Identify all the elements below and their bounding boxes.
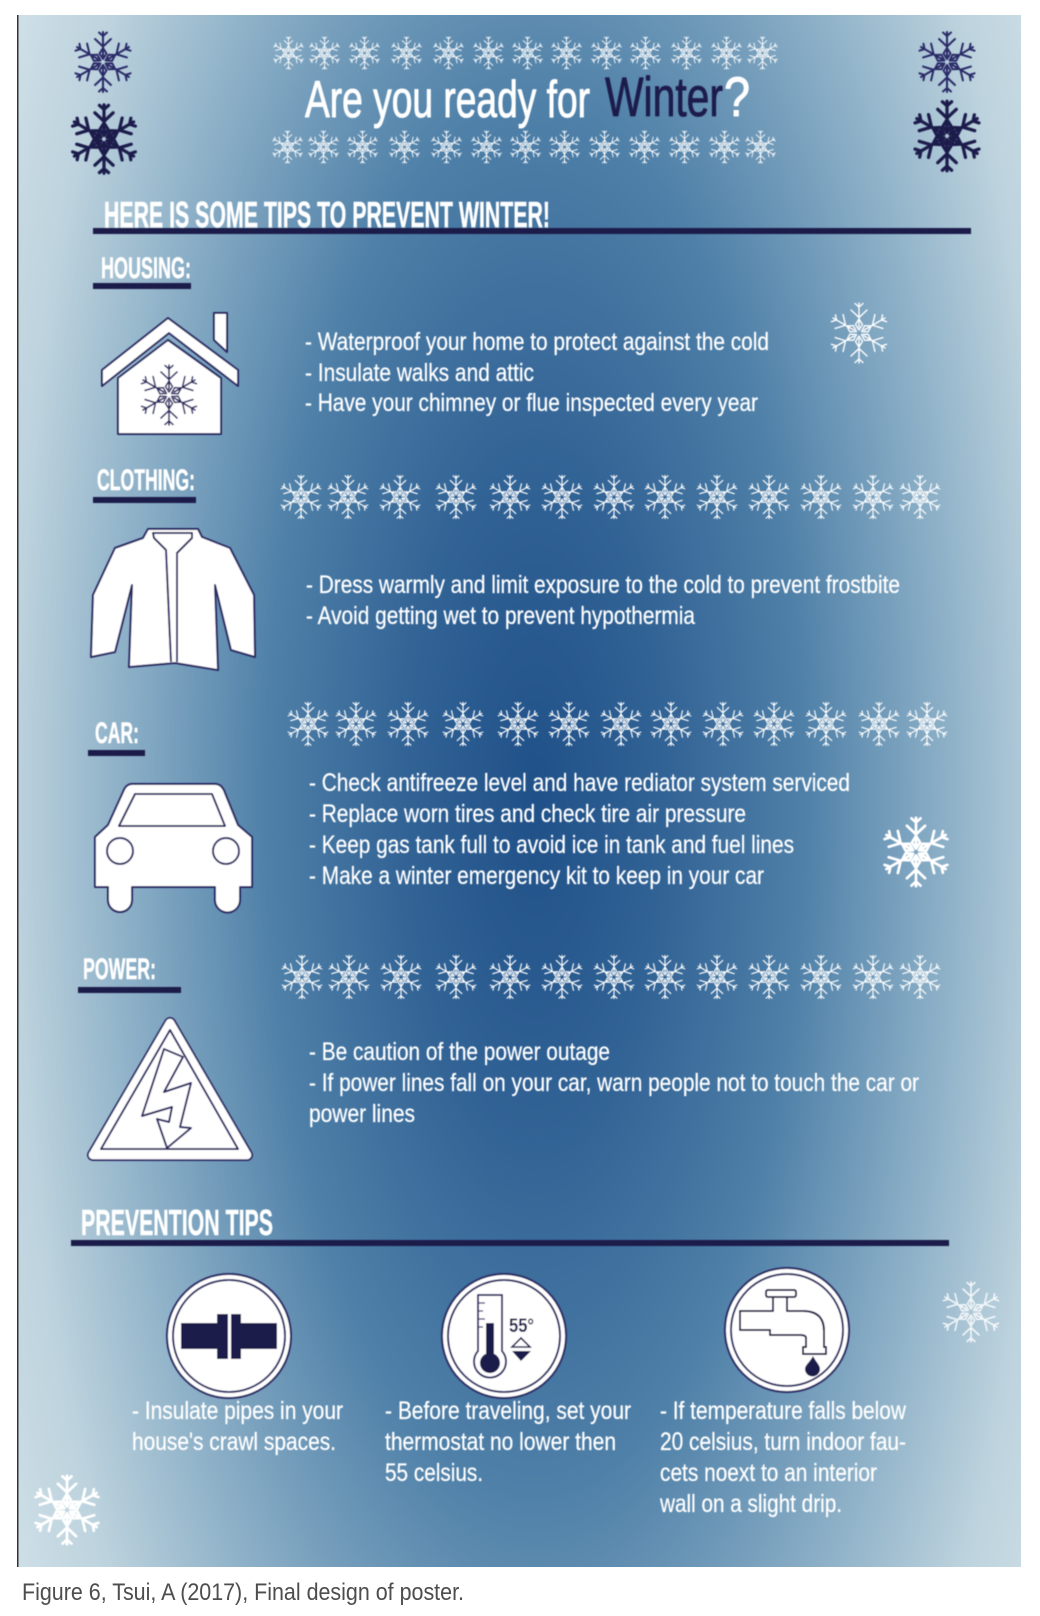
snowflake row: car [286, 702, 949, 746]
text: faucet tip: cets noext to an interior [660, 1459, 877, 1487]
caption: Figure 6, Tsui, A (2017), Final design of poster. [22, 1579, 464, 1606]
title: ? [724, 65, 750, 128]
snowflake: housing [829, 303, 889, 363]
text: car tips: - Replace worn tires and check tire air pressure [309, 800, 746, 828]
text: car tips: - Keep gas tank full to avoid ice in tank and fuel lines [309, 831, 794, 859]
text: housing tips: - Have your chimney or flue inspected every year [305, 389, 758, 417]
text: car tips: - Make a winter emergency kit to keep in your car [309, 862, 764, 890]
text: power tips: - If power lines fall on your car, warn people not to touch the car or [309, 1069, 919, 1097]
heading: housing [93, 252, 191, 289]
text: housing tips: - Insulate walks and attic [305, 359, 534, 387]
snowflake: car [882, 818, 950, 886]
icon: dripping faucet [725, 1268, 849, 1392]
text: power tips: - Be caution of the power outage [309, 1038, 610, 1066]
text: faucet tip: 20 celsius, turn indoor fau- [660, 1428, 906, 1456]
text: car tips: - Check antifreeze level and have rediator system serviced [309, 769, 850, 797]
heading: car [88, 717, 145, 756]
text: faucet tip: - If temperature falls below [660, 1397, 907, 1425]
text: faucet tip: wall on a slight drip. [659, 1490, 842, 1518]
icon: thermometer 55 degrees: 55° [509, 1316, 534, 1337]
text: power tips: power lines [309, 1100, 415, 1128]
icon: thermometer 55 degrees [442, 1274, 566, 1398]
section heading: prevention tips [71, 1202, 949, 1246]
text: clothing tips: - Dress warmly and limit exposure to the cold to prevent frostbite [306, 571, 900, 599]
text: clothing tips: - Avoid getting wet to prevent hypothermia [306, 602, 695, 630]
text: housing tips: - Waterproof your home to protect against the cold [305, 328, 769, 356]
icon: power warning triangle [93, 1023, 247, 1155]
header: dark snowflakes left [70, 32, 138, 173]
heading: power [78, 953, 181, 993]
text: power tips [309, 1038, 919, 1128]
heading: car: CAR: [95, 717, 139, 750]
text: clothing tips [306, 571, 900, 630]
icon: car [95, 784, 252, 912]
icon: jacket [91, 529, 255, 670]
snowflake: bottom right [941, 1282, 1001, 1342]
heading: clothing: CLOTHING: [97, 464, 195, 497]
title: Are you ready for [305, 71, 590, 129]
header: dark snowflakes right [912, 32, 982, 171]
heading: clothing [93, 464, 196, 503]
text: pipes tip: - Insulate pipes in your [132, 1397, 343, 1425]
text: car tips [309, 769, 850, 890]
text: thermostat tip: 55 celsius. [385, 1459, 483, 1487]
snowflake row: power [280, 955, 942, 999]
text: pipes tip: house's crawl spaces. [132, 1428, 336, 1456]
text: faucet tip [659, 1397, 907, 1518]
snowflake row: clothing [279, 475, 942, 519]
text: thermostat tip: thermostat no lower then [385, 1428, 616, 1456]
text: thermostat tip [385, 1397, 631, 1487]
snowflake: bottom left [33, 1476, 101, 1544]
heading: power: POWER: [83, 953, 156, 986]
title: Winter [605, 65, 723, 128]
section heading: prevention tips: PREVENTION TIPS [81, 1202, 273, 1243]
section heading: tips: HERE IS SOME TIPS TO PREVENT WINTER! [104, 194, 550, 235]
text: pipes tip [132, 1397, 343, 1456]
icon: house [102, 313, 238, 434]
header: top snowflake row [272, 37, 779, 69]
header: bottom snowflake row [271, 131, 777, 163]
text: thermostat tip: - Before traveling, set your [385, 1397, 631, 1425]
text: housing tips [305, 328, 769, 417]
heading: housing: HOUSING: [101, 252, 191, 285]
poster left edge line [17, 15, 18, 1567]
icon: pipe joint [167, 1274, 291, 1398]
